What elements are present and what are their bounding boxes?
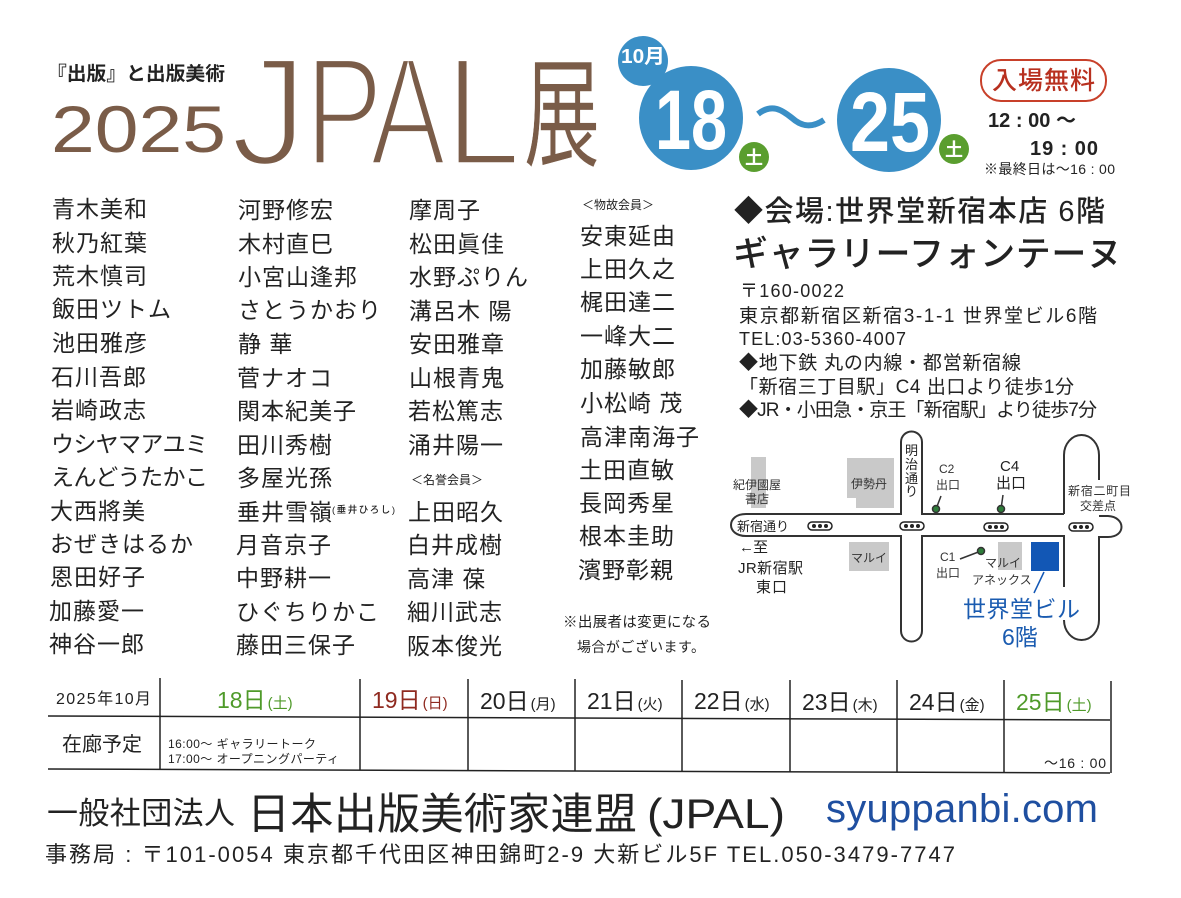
artist list: column 3: 高津 葆 bbox=[407, 566, 486, 592]
map: labels: 治 bbox=[905, 457, 918, 472]
table: date headers bbox=[217, 687, 1092, 715]
map: labels: マルイ bbox=[985, 556, 1021, 570]
map: labels: C2 bbox=[939, 462, 955, 476]
admission free pill: 入場無料 bbox=[992, 67, 1095, 95]
artist list: column 1: 荒木慎司 bbox=[52, 263, 148, 289]
table: date headers: 23日(木) bbox=[802, 689, 878, 715]
artist list: column 2 bbox=[236, 197, 395, 658]
artist list: column 2: 関本紀美子 bbox=[237, 398, 357, 424]
organizer name: 一般社団法人 bbox=[47, 796, 235, 831]
artist list: column 3: 涌井陽一 bbox=[408, 432, 504, 458]
artist list: column 2: 月音京子 bbox=[236, 532, 332, 558]
map: labels: 明 bbox=[905, 443, 918, 458]
artist list: column 1: 石川吾郎 bbox=[51, 364, 147, 390]
table: month label: 2025年10月 bbox=[56, 690, 151, 708]
venue address and access: ◆地下鉄 丸の内線・都営新宿線 bbox=[739, 352, 1021, 374]
map: labels: アネックス bbox=[972, 573, 1032, 587]
artist list: column 2: 静 華 bbox=[238, 331, 293, 357]
subtitle: 『出版』と出版美術 bbox=[47, 62, 225, 85]
artist list: column 3: 安田雅章 bbox=[409, 331, 505, 357]
map: labels: 紀伊國屋 bbox=[733, 478, 781, 492]
schedule table bbox=[48, 678, 1111, 773]
artist list: column 2: 木村直巳 bbox=[238, 231, 334, 257]
map: labels: 東口 bbox=[756, 579, 787, 596]
artist list: column 4, deceased members: 土田直敏 bbox=[579, 457, 675, 483]
table: grid lines bbox=[48, 678, 1111, 773]
venue heading: ◆会場:世界堂新宿本店 6階 bbox=[734, 195, 1105, 228]
map: labels: 出口 bbox=[936, 478, 960, 492]
artist list: column 4, deceased members: ＜物故会員＞ bbox=[582, 197, 654, 212]
office address: 事務局 : 〒101-0054 東京都千代田区神田錦町2-9 大新ビル5F TEL.050-3479-7747 bbox=[45, 842, 955, 867]
map: labels: り bbox=[905, 484, 918, 499]
organizer name: 日本出版美術家連盟 bbox=[247, 791, 637, 839]
map: labels: 出口 bbox=[996, 475, 1026, 492]
badge: Saturday bbox=[739, 142, 769, 172]
artist list: column 2: 河野修宏 bbox=[238, 197, 334, 223]
artist list: column 1: 青木美和 bbox=[52, 196, 148, 222]
artist list: column 1: 大西將美 bbox=[50, 498, 146, 524]
map: station markers bbox=[808, 522, 1093, 531]
artist list: column 1: ウシヤマアユミ bbox=[51, 431, 209, 457]
note on artist changes: ※出展者は変更になる bbox=[563, 614, 711, 631]
artist list: column 2: 多屋光孫 bbox=[237, 465, 333, 491]
artist list: column 4, deceased members: 高津南海子 bbox=[580, 424, 700, 450]
artist list: column 2: 垂井雪嶺 bbox=[237, 499, 333, 525]
map: labels: 新宿通り bbox=[737, 519, 789, 534]
date badges bbox=[618, 36, 969, 172]
map: labels: 6階 bbox=[1002, 624, 1038, 650]
note on artist changes bbox=[563, 614, 711, 655]
artist list: column 3: 白井成樹 bbox=[407, 532, 503, 558]
artist list: column 4, deceased members: 加藤敏郎 bbox=[580, 356, 676, 382]
artist list: column 1: 秋乃紅葉 bbox=[52, 230, 148, 256]
artist list: column 2: 菅ナオコ bbox=[237, 365, 333, 391]
map: labels: 書店 bbox=[745, 492, 769, 506]
artist list: column 1: えんどうたかこ bbox=[51, 464, 209, 490]
artist list: column 2: 中野耕一 bbox=[236, 565, 332, 591]
map: destination building bbox=[1031, 542, 1059, 593]
opening hours: 19 : 00 bbox=[1030, 138, 1098, 160]
JPAL wordmark bbox=[230, 25, 521, 198]
artist list: column 2: ひぐちりかこ bbox=[236, 599, 380, 625]
table: date headers: 20日(月) bbox=[480, 688, 556, 714]
map: labels: ←至 bbox=[739, 539, 768, 556]
map: exit markers bbox=[932, 495, 1004, 559]
badge: Saturday: 土 bbox=[745, 148, 763, 168]
artist list: column 4, deceased members: 小松崎 茂 bbox=[580, 390, 683, 416]
badge: 18: 18 bbox=[655, 73, 727, 167]
map: labels bbox=[733, 443, 1131, 650]
map: labels: マルイ bbox=[851, 551, 887, 565]
artist list: column 4, deceased members: 長岡秀星 bbox=[579, 490, 675, 516]
map: destination label: 世界堂ビル bbox=[963, 596, 1080, 622]
table: date headers: 25日(土) bbox=[1016, 689, 1092, 715]
artist list: column 3: 溝呂木 陽 bbox=[409, 298, 512, 324]
artist list: column 1: 池田雅彦 bbox=[52, 330, 148, 356]
venue address and access: ◆JR・小田急・京王「新宿駅」より徒歩7分 bbox=[739, 399, 1097, 421]
map: labels: 新宿二町目 bbox=[1068, 484, 1131, 498]
artist list: column 1: 神谷一郎 bbox=[49, 631, 145, 657]
map: roads bbox=[731, 432, 1122, 642]
artist list: column 3: 摩周子 bbox=[409, 197, 481, 223]
website: syuppanbi.com bbox=[826, 787, 1098, 831]
table: date headers: 19日(日) bbox=[372, 687, 448, 713]
artist list: column 4, deceased members: 濱野彰親 bbox=[578, 557, 674, 583]
artist list: column 1 bbox=[49, 196, 209, 657]
artist list: column 4, deceased members: 上田久之 bbox=[580, 256, 676, 282]
venue address and access: 〒160-0022 bbox=[740, 281, 844, 301]
map: labels: C4 bbox=[1000, 458, 1019, 475]
badge: October: 10月 bbox=[621, 46, 665, 68]
opening hours bbox=[984, 110, 1115, 177]
organizer name bbox=[47, 790, 785, 839]
artist list: column 3: 山根青鬼 bbox=[409, 365, 505, 391]
header: exhibition title bbox=[47, 25, 600, 198]
JPAL wordmark: J bbox=[230, 25, 308, 198]
badge: 25: 25 bbox=[850, 75, 930, 169]
table: opening day events: 17:00～ オープニングパーティ bbox=[168, 752, 339, 766]
artist list: column 2: 小宮山逢邦 bbox=[238, 264, 358, 290]
badge: Saturday bbox=[939, 134, 969, 164]
JPAL wordmark: L bbox=[445, 25, 521, 198]
opening hours: ※最終日は～16 : 00 bbox=[984, 161, 1115, 177]
map: labels: 伊勢丹 bbox=[851, 476, 887, 491]
artist list: column 2: 田川秀樹 bbox=[237, 432, 333, 458]
JPAL wordmark: A bbox=[370, 25, 446, 198]
map: landmark blocks bbox=[751, 457, 1022, 571]
artist list: column 1: 岩崎政志 bbox=[51, 397, 147, 423]
badge: Saturday: 土 bbox=[945, 140, 963, 160]
table: last day closing time: ～16 : 00 bbox=[1044, 755, 1106, 771]
artist list: column 3: 松田眞佳 bbox=[409, 231, 505, 257]
map: labels: C1 bbox=[940, 550, 956, 564]
artist list: column 3 bbox=[407, 197, 529, 659]
opening hours: 12 : 00 ～ bbox=[988, 110, 1076, 132]
honorary members heading: ＜名誉会員＞ bbox=[411, 472, 483, 487]
artist list: column 3: 水野ぷりん bbox=[409, 264, 529, 290]
artist list: column 3: 上田昭久 bbox=[408, 499, 504, 525]
artist list: column 4, deceased members: 梶田達二 bbox=[580, 289, 676, 315]
artist list: column 1: 飯田ツトム bbox=[52, 296, 172, 322]
exhibition kanji: 展 bbox=[524, 49, 600, 183]
map: labels: 通 bbox=[905, 471, 918, 486]
artist list: column 1: おぜきはるか bbox=[50, 531, 194, 557]
artist list: column 2: (垂井ひろし) bbox=[332, 504, 395, 516]
JPAL wordmark: P bbox=[305, 25, 383, 198]
artist list: column 3: 阪本俊光 bbox=[407, 633, 503, 659]
year 2025: 2025 bbox=[51, 92, 226, 166]
table: date headers: 22日(水) bbox=[694, 688, 770, 714]
artist list: column 2: 藤田三保子 bbox=[236, 632, 356, 658]
badge: October bbox=[618, 36, 668, 86]
venue address and access: TEL:03-5360-4007 bbox=[739, 329, 906, 349]
venue address and access: 東京都新宿区新宿3-1-1 世界堂ビル6階 bbox=[739, 305, 1097, 327]
wave dash bbox=[758, 108, 824, 125]
map: labels: 出口 bbox=[936, 566, 960, 580]
table: opening day events: 16:00～ ギャラリートーク bbox=[168, 737, 316, 751]
venue address and access: 「新宿三丁目駅」C4 出口より徒歩1分 bbox=[739, 376, 1074, 398]
table: row label: 在廊予定 bbox=[62, 733, 142, 756]
table: date headers: 24日(金) bbox=[909, 689, 985, 715]
artist list: column 4, deceased members: 一峰大二 bbox=[580, 323, 676, 349]
map: labels: 交差点 bbox=[1080, 499, 1116, 513]
artist list: column 2: さとうかおり bbox=[238, 297, 382, 323]
artist list: column 1: 恩田好子 bbox=[50, 564, 146, 590]
admission free pill bbox=[981, 60, 1106, 101]
artist list: column 3: 細川武志 bbox=[407, 599, 503, 625]
note on artist changes: 場合がございます。 bbox=[577, 639, 705, 655]
artist list: column 1: 加藤愛一 bbox=[49, 598, 145, 624]
venue heading: ギャラリーフォンテーヌ bbox=[733, 235, 1122, 274]
venue address and access bbox=[739, 281, 1097, 421]
artist list: column 4, deceased members: 根本圭助 bbox=[579, 523, 675, 549]
access map bbox=[731, 432, 1131, 650]
table: opening day events bbox=[168, 737, 339, 766]
venue heading bbox=[733, 195, 1122, 274]
artist list: column 4, deceased members bbox=[578, 197, 700, 583]
artist list: column 4, deceased members: 安東延由 bbox=[580, 223, 676, 249]
artist list: column 3: 若松篤志 bbox=[408, 398, 504, 424]
table: date headers: 18日(土) bbox=[217, 687, 293, 713]
map: labels: JR新宿駅 bbox=[738, 560, 803, 577]
organizer name: (JPAL) bbox=[647, 790, 785, 837]
table: date headers: 21日(火) bbox=[587, 688, 663, 714]
